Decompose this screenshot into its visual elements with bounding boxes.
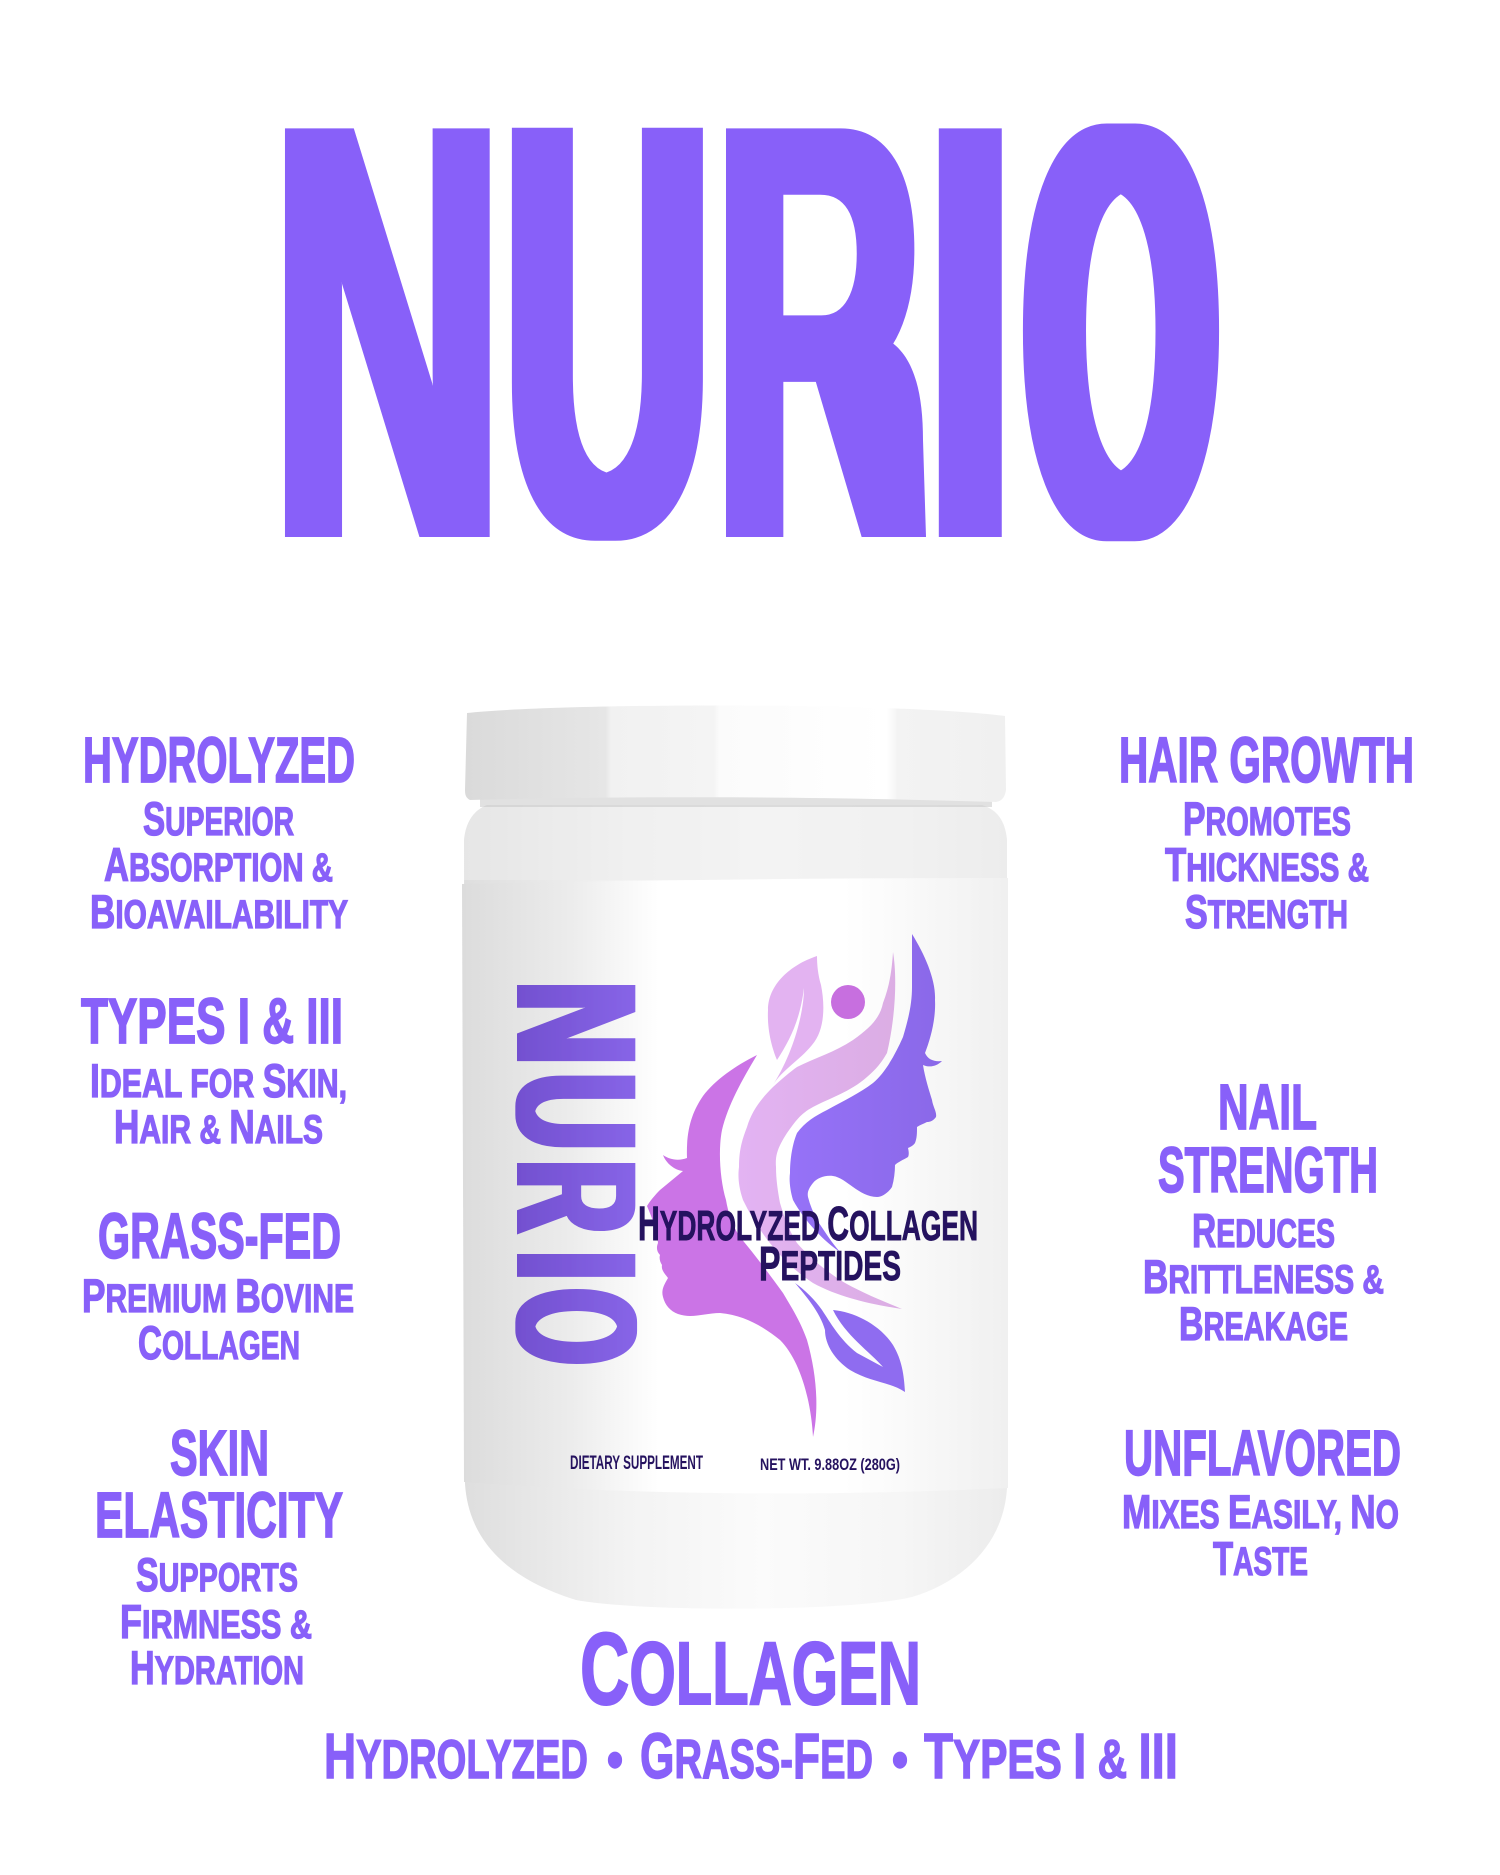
jar product name: PEPTIDES	[759, 1238, 901, 1291]
jar brand name: O	[480, 1289, 672, 1364]
heading: NAIL	[1218, 1071, 1317, 1143]
callout: nail strength	[1143, 1071, 1384, 1350]
bottom tagline	[324, 1720, 1178, 1792]
callout: hair growth	[1119, 724, 1414, 938]
pink face	[647, 1055, 816, 1437]
heading: STRENGTH	[1158, 1134, 1378, 1206]
bottom tagline: GRASS-FED	[640, 1720, 873, 1792]
product jar	[462, 705, 1008, 1609]
jar lid	[465, 705, 1006, 802]
jar small print: net weight: NET WT. 9.88OZ (280G)	[760, 1455, 900, 1474]
purple face	[790, 934, 942, 1252]
description: THICKNESS &	[1165, 838, 1369, 891]
title: NURIO: U	[505, 1, 710, 661]
heading: HYDROLYZED	[83, 724, 355, 796]
description	[1122, 1485, 1399, 1585]
description: BRITTLENESS &	[1143, 1250, 1384, 1303]
jar brand name: I	[479, 1251, 672, 1280]
title: NURIO: N	[272, 1, 503, 664]
jar lid shadow	[480, 797, 992, 807]
description: REDUCES	[1192, 1204, 1335, 1257]
description	[1143, 1204, 1384, 1350]
jar brand name: N	[479, 981, 672, 1065]
description: MIXES EASILY, NO	[1122, 1485, 1399, 1538]
jar product name	[638, 1198, 978, 1291]
description: ABSORPTION &	[104, 838, 333, 891]
description: COLLAGEN	[138, 1316, 300, 1369]
description: TASTE	[1213, 1532, 1308, 1585]
upper leaf	[768, 956, 823, 1085]
description: BIOAVAILABILITY	[90, 885, 348, 938]
jar brand name	[479, 981, 672, 1364]
heading: GRASS-FED	[98, 1200, 341, 1272]
heading: SKIN	[170, 1417, 269, 1489]
description: STRENGTH	[1185, 885, 1348, 938]
description	[82, 1269, 354, 1369]
heading	[1158, 1071, 1378, 1206]
description: SUPPORTS	[136, 1548, 298, 1601]
description	[1165, 792, 1369, 938]
jar brand name: R	[480, 1160, 672, 1233]
lower leaf	[795, 1283, 905, 1392]
jar product name: HYDROLYZED COLLAGEN	[638, 1198, 978, 1251]
jar brand name: U	[480, 1073, 671, 1150]
heading: ELASTICITY	[95, 1479, 343, 1551]
bottom tagline: TYPES I & III	[924, 1720, 1178, 1792]
description	[90, 1054, 347, 1153]
description: SUPERIOR	[143, 792, 294, 845]
description: HAIR & NAILS	[114, 1100, 323, 1153]
bottom heading: collagen: COLLAGEN	[580, 1612, 921, 1726]
logo: faces and leaves	[647, 934, 942, 1437]
title: NURIO: R	[715, 0, 922, 663]
jar body	[464, 805, 1007, 1609]
description: BREAKAGE	[1179, 1297, 1348, 1350]
callout: hydrolyzed	[83, 724, 355, 938]
jar label	[462, 878, 1008, 1493]
title: NURIO: I	[925, 0, 1016, 663]
jar small print: dietary supplement: DIETARY SUPPLEMENT	[570, 1453, 703, 1474]
description: FIRMNESS &	[120, 1595, 312, 1648]
dot	[831, 985, 865, 1019]
callout: skin elasticity	[95, 1417, 343, 1694]
description: PROMOTES	[1183, 792, 1351, 845]
title: NURIO: O	[1027, 2, 1215, 661]
description: IDEAL FOR SKIN,	[90, 1054, 347, 1107]
description: PREMIUM BOVINE	[82, 1269, 354, 1322]
heading	[95, 1417, 343, 1551]
bottom tagline: HYDROLYZED	[324, 1720, 588, 1792]
callout: unflavored	[1122, 1417, 1401, 1585]
callout: types I and III	[81, 985, 347, 1153]
title: NURIO	[272, 0, 1215, 664]
heading: TYPES I & III	[81, 985, 343, 1057]
callout: grass-fed	[82, 1200, 354, 1369]
light band	[738, 952, 902, 1309]
jar shoulder shading	[464, 805, 1007, 880]
description	[90, 792, 348, 938]
bottom tagline: •	[607, 1728, 623, 1790]
description	[120, 1548, 312, 1694]
description: HYDRATION	[130, 1641, 304, 1694]
bottom tagline: •	[892, 1728, 908, 1790]
